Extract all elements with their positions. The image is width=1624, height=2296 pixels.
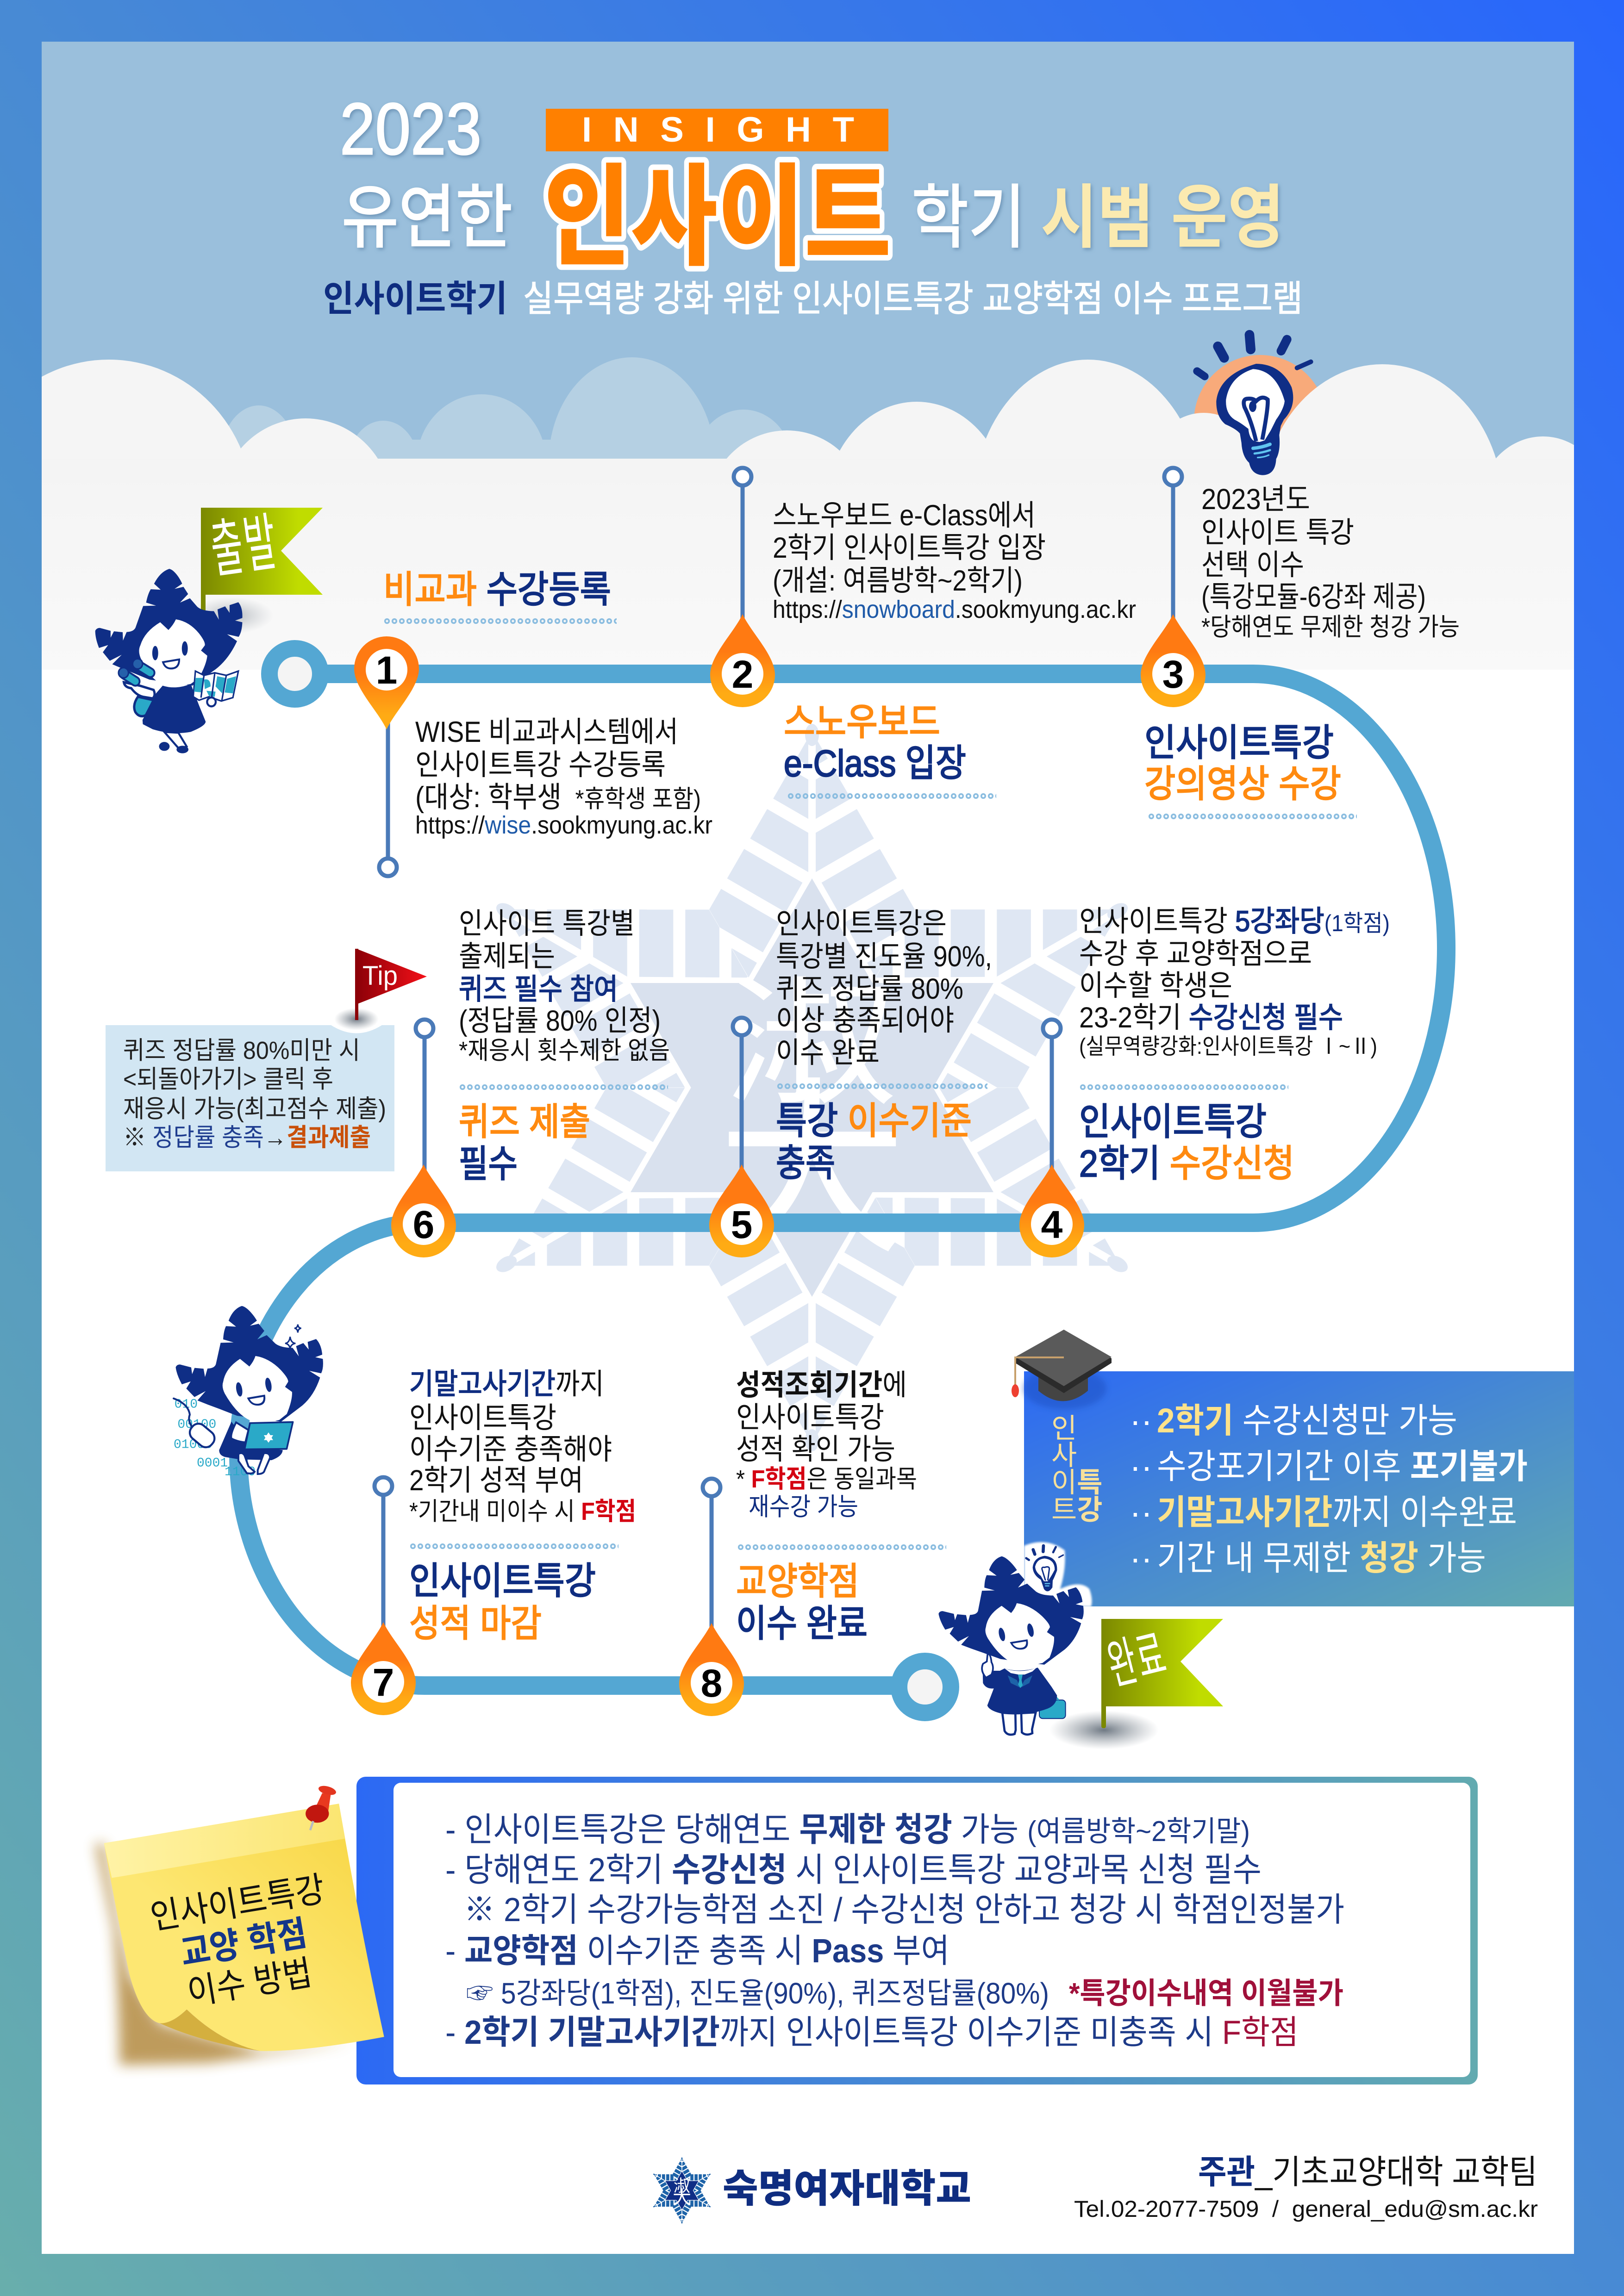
- step 7 text: *기간내 미이수 시 F학점: [409, 1498, 636, 1525]
- step 3 text: (특강모듈-6강좌 제공): [1201, 581, 1426, 613]
- mascot: student with laptop: 0001: [197, 1456, 228, 1470]
- leader lines: [375, 468, 1182, 1629]
- watermark: university emblem: [316, 622, 1308, 1554]
- step 8 text: 인사이트특강: [736, 1401, 884, 1434]
- start ring: [269, 648, 320, 699]
- bullet list: ··: [1130, 1539, 1152, 1577]
- tip box: <되돌아가기> 클릭 후: [123, 1065, 333, 1093]
- step 7 text: 인사이트특강: [409, 1402, 556, 1434]
- marker 8: [679, 1623, 744, 1716]
- step 6 text: (정답률 80% 인정): [459, 1005, 661, 1037]
- marker 4: [1019, 1164, 1084, 1257]
- mascot: graduate with bulb and briefcase: [928, 1542, 1094, 1735]
- step 3 heading: 인사이트특강: [1144, 722, 1334, 764]
- sticky note: [95, 1784, 384, 2065]
- mascot: student with laptop: 1100: [225, 1465, 256, 1479]
- step 5 heading: 충족: [776, 1143, 835, 1184]
- mascot: student with laptop: 010: [175, 1398, 198, 1412]
- watermark: university emblem: 淑: [725, 931, 899, 1132]
- tip box: [106, 1025, 394, 1171]
- step 3 heading: 강의영상 수강: [1144, 764, 1341, 805]
- vertical label: 사: [1051, 1440, 1077, 1471]
- university logo: 숙명여자대학교: [723, 2167, 971, 2210]
- step 5 text: 이상 충족되어야: [776, 1004, 954, 1037]
- note text: 이수 방법: [185, 1953, 315, 2013]
- step 2 text: 스노우보드 e-Class에서: [773, 499, 1036, 532]
- subtitle: 실무역량 강화 위한 인사이트특강 교양학점 이수 프로그램: [523, 278, 1303, 319]
- bullet list: [1130, 1401, 1528, 1577]
- bullet list: 수강포기기간 이후 포기불가: [1157, 1447, 1528, 1486]
- step 5 text: 퀴즈 정답률 80%: [776, 973, 963, 1005]
- marker 3: 3: [1162, 653, 1184, 696]
- step 2 text: (개설: 여름방학~2학기): [773, 565, 1023, 597]
- step 7 text: 기말고사기간까지: [409, 1368, 604, 1400]
- vertical label: [1051, 1413, 1102, 1525]
- subtitle: 인사이트학기: [323, 278, 507, 319]
- step 3 text: 선택 이수: [1201, 549, 1304, 581]
- step 8 text: 재수강 가능: [749, 1493, 858, 1521]
- tip flag: [324, 949, 427, 1039]
- step 4 heading: 2학기 수강신청: [1079, 1143, 1294, 1185]
- marker 1: 1: [376, 648, 397, 692]
- marker 5: 5: [731, 1203, 752, 1246]
- marker 3: [1141, 614, 1206, 707]
- main title word: 인사이트: [544, 156, 891, 279]
- step 8 text: [736, 1369, 917, 1521]
- bullet list: 기말고사기간까지 이수완료: [1157, 1493, 1517, 1531]
- icon: graduation cap: [1012, 1330, 1112, 1409]
- step 4 text: 23-2학기 수강신청 필수: [1079, 1002, 1343, 1034]
- step 3 heading: [1144, 722, 1357, 820]
- step 3 text: 2023년도: [1201, 483, 1310, 516]
- mascot: student with laptop: [167, 1306, 331, 1479]
- step 5 heading: 특강 이수기준: [776, 1101, 972, 1142]
- step 8 text: 성적 확인 가능: [736, 1433, 895, 1466]
- step 5 text: [776, 908, 992, 1069]
- title: 2023: [340, 88, 481, 170]
- tip box: ※ 정답률 충족→결과제출: [123, 1124, 371, 1151]
- step 1 text: [415, 716, 712, 839]
- marker 8: 8: [701, 1661, 722, 1705]
- step 1 text: WISE 비교과시스템에서: [415, 716, 678, 748]
- bullet list: ··: [1130, 1447, 1152, 1486]
- note line 1: - 인사이트특강은 당해연도 무제한 청강 가능 (여름방학~2학기말): [445, 1811, 1250, 1848]
- note line 4: - 교양학점 이수기준 충족 시 Pass 부여: [445, 1933, 949, 1970]
- vertical label: 이특: [1051, 1467, 1102, 1498]
- marker 2: [710, 614, 775, 707]
- title: 시범 운영: [1041, 179, 1284, 256]
- marker 6: [391, 1164, 456, 1257]
- step 5 heading: [776, 1083, 987, 1184]
- step 4 heading: 인사이트특강: [1079, 1101, 1267, 1143]
- note line 3: ※ 2학기 수강가능학점 소진 / 수강신청 안하고 청강 시 학점인정불가: [464, 1892, 1344, 1929]
- step 2 heading: 스노우보드: [784, 702, 940, 743]
- step 4 text: 인사이트특강 5강좌당(1학점): [1079, 905, 1390, 938]
- mascot: explorer with binoculars and map: [95, 569, 243, 753]
- step 6 text: 출제되는: [459, 940, 555, 973]
- step 2 heading: [784, 702, 996, 799]
- step 8 heading: [736, 1544, 946, 1645]
- step 7 heading: [409, 1543, 618, 1645]
- step 2 text: [773, 499, 1136, 623]
- university logo: 淑: [674, 2172, 690, 2196]
- step 5 text: 이수 완료: [776, 1037, 880, 1069]
- step 1 text: (대상: 학부생 *휴학생 포함): [415, 781, 701, 814]
- step 8 text: * F학점은 동일과목: [736, 1465, 917, 1493]
- step 6 heading: 퀴즈 제출: [459, 1101, 590, 1143]
- start flag: 출발: [206, 507, 281, 585]
- vertical label: 트강: [1051, 1494, 1102, 1525]
- step 3 text: [1201, 483, 1460, 641]
- step 7 text: 2학기 성적 부여: [409, 1464, 583, 1497]
- tip flag: Tip: [362, 961, 398, 991]
- insight badge: INSIGHT: [582, 110, 854, 149]
- note text: 교양 학점: [178, 1914, 310, 1973]
- icon: light bulb: [1196, 335, 1311, 475]
- step 4 text: (실무역량강화:인사이트특강 Ⅰ~Ⅱ): [1079, 1034, 1377, 1059]
- step 8 heading: 이수 완료: [736, 1603, 868, 1645]
- step 6 heading: 필수: [459, 1144, 518, 1185]
- note line 5: ☞ 5강좌당(1학점), 진도율(90%), 퀴즈정답률(80%): [466, 1977, 1049, 2010]
- step 4 text: 이수할 학생은: [1079, 970, 1232, 1002]
- organizer: Tel.02-2077-7509 / general_edu@sm.ac.kr: [1074, 2196, 1538, 2222]
- step 1 text: https://wise.sookmyung.ac.kr: [415, 811, 712, 839]
- sky and clouds: [42, 42, 1574, 585]
- title: 학기: [912, 179, 1025, 256]
- bullet list: 기간 내 무제한 청강 가능: [1157, 1539, 1486, 1577]
- university logo: [637, 2148, 971, 2233]
- organizer: 주관_기초교양대학 교학팀: [1198, 2154, 1537, 2191]
- title: 유연한: [342, 179, 512, 256]
- organizer: [1074, 2154, 1538, 2222]
- note line 2: - 당해연도 2학기 수강신청 시 인사이트특강 교양과목 신청 필수: [445, 1852, 1262, 1889]
- finish flag: 완료: [1102, 1624, 1171, 1696]
- notes panel: [356, 1777, 1478, 2084]
- vertical label: 인: [1051, 1413, 1077, 1444]
- step 1 heading: 비교과 수강등록: [383, 569, 611, 611]
- step 6 heading: [459, 1084, 668, 1185]
- tip box: 퀴즈 정답률 80%미만 시: [123, 1037, 360, 1064]
- step 5 text: 인사이트특강은: [776, 908, 947, 940]
- mascot: student with laptop: 01000: [174, 1437, 212, 1452]
- step 5 text: 특강별 진도율 90%,: [776, 940, 992, 973]
- step 6 text: 인사이트 특강별: [459, 908, 635, 940]
- note artwork: [95, 1784, 384, 2065]
- title: [340, 88, 1284, 279]
- step 4 text: 수강 후 교양학점으로: [1079, 938, 1312, 970]
- tip box: 재응시 가능(최고점수 제출): [123, 1095, 386, 1123]
- note line 6: - 2학기 기말고사기간까지 인사이트특강 이수기준 미충족 시 F학점: [445, 2014, 1299, 2051]
- info box: [1024, 1371, 1574, 1606]
- route path: [238, 674, 1446, 1686]
- marker 6: 6: [413, 1203, 434, 1246]
- marker 1: [354, 636, 419, 729]
- university logo: 大: [673, 2183, 691, 2209]
- step 7 heading: 성적 마감: [409, 1603, 542, 1645]
- mascot: student with laptop: 00100: [177, 1418, 216, 1432]
- watermark: university emblem: 大: [717, 1017, 907, 1292]
- step 8 text: 성적조회기간에: [736, 1369, 907, 1401]
- bullet list: 2학기 수강신청만 가능: [1157, 1401, 1457, 1440]
- step 2 text: https://snowboard.sookmyung.ac.kr: [773, 596, 1136, 623]
- step 6 text: *재응시 횟수제한 없음: [459, 1037, 670, 1064]
- step 1 text: 인사이트특강 수강등록: [415, 749, 666, 781]
- note line 5: *특강이수내역 이월불가: [1069, 1977, 1343, 2010]
- step 2 text: 2학기 인사이트특강 입장: [773, 532, 1046, 564]
- note text: 인사이트특강: [148, 1869, 328, 1937]
- marker 5: [709, 1164, 774, 1257]
- start flag: [190, 507, 323, 634]
- step 6 text: 퀴즈 필수 참여: [459, 973, 618, 1006]
- step 3 text: *당해연도 무제한 청강 가능: [1201, 613, 1460, 641]
- step 4 text: [1079, 905, 1390, 1059]
- note text: [148, 1869, 328, 2013]
- step 7 heading: 인사이트특강: [409, 1561, 596, 1602]
- bullet list: ··: [1130, 1493, 1152, 1531]
- marker 4: 4: [1041, 1203, 1063, 1246]
- marker 2: 2: [732, 653, 753, 696]
- finish flag: [1049, 1619, 1223, 1749]
- step 3 text: 인사이트 특강: [1201, 516, 1354, 549]
- bullet list: ··: [1130, 1401, 1152, 1440]
- marker 7: 7: [373, 1661, 394, 1704]
- step 2 heading: e-Class 입장: [784, 743, 966, 784]
- step 7 text: 이수기준 충족해야: [409, 1433, 612, 1466]
- marker 7: [351, 1622, 416, 1715]
- end ring: [899, 1661, 951, 1713]
- step 4 heading: [1079, 1084, 1294, 1185]
- step 8 heading: 교양학점: [736, 1561, 859, 1603]
- step 6 text: [459, 908, 670, 1064]
- step 7 text: [409, 1368, 636, 1525]
